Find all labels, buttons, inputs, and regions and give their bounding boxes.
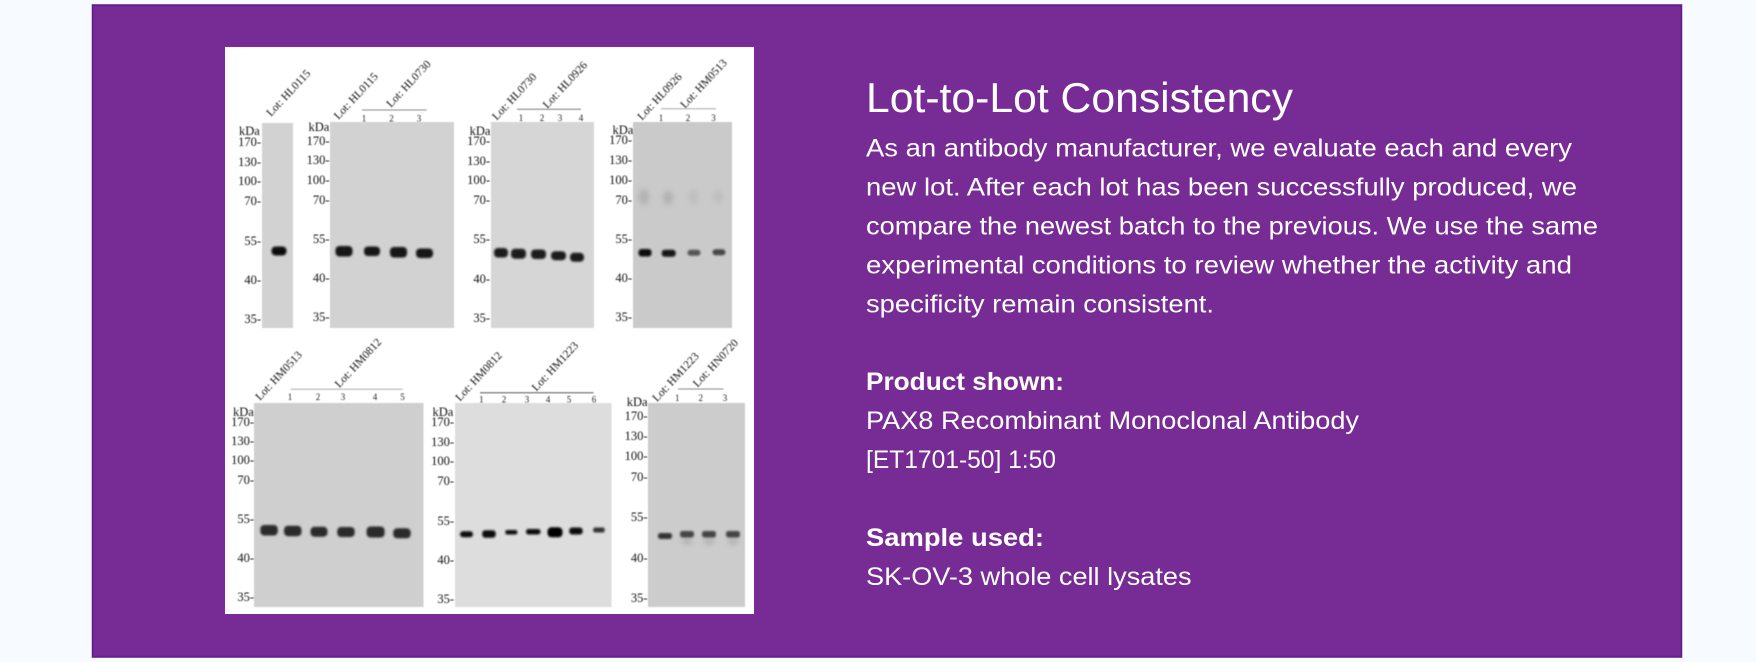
heading: Lot-to-Lot Consistency (866, 74, 1293, 121)
blot: Lots HM1223 and HN0720: 40- (631, 551, 648, 565)
text block: description: new lot. After each lot has been successfully produced, we (866, 174, 1577, 202)
blot: Lots HM0812 and HM1223: 2 (502, 394, 506, 404)
blot: Lot HL0115: 40- (244, 273, 261, 287)
blot: Lots HM0513 and HM0812: 70- (237, 473, 254, 487)
blot: Lots HM0812 and HM1223: kDa (432, 405, 454, 419)
blot: Lots HL0926 and HM0513: 2 (686, 113, 690, 123)
blot: Lots HM0513 and HM0812: 3 (341, 392, 346, 402)
text block: description: As an antibody manufacturer, we evaluate each and every (866, 135, 1573, 163)
blot: Lots HL0730 and HL0926: 3 (558, 113, 563, 123)
blot: Lots HL0730 and HL0926: 1 (519, 113, 523, 123)
blot: Lots HL0115 and HL0730: 130- (307, 153, 330, 167)
blot: Lots HL0926 and HM0513: 40- (615, 271, 632, 285)
blot: Lots HL0730 and HL0926: 55- (473, 232, 490, 246)
blot: Lots HM0513 and HM0812: 170- (231, 415, 254, 429)
blot: Lots HL0115 and HL0730: 170- (307, 134, 330, 148)
blot: Lot HL0115: 70- (244, 194, 261, 208)
blot: Lots HM0513 and HM0812: 130- (231, 434, 254, 448)
blot: Lots HM0812 and HM1223: 100- (431, 454, 454, 468)
blot: Lots HM0513 and HM0812: 1 (288, 392, 292, 402)
blot: Lots HL0730 and HL0926: 35- (473, 311, 490, 325)
blot: Lots HM0513 and HM0812: 35- (237, 590, 254, 604)
blot: Lots HM0513 and HM0812: 4 (373, 392, 378, 402)
blot: Lots HL0926 and HM0513: 100- (609, 173, 632, 187)
text block: sample used: SK-OV-3 whole cell lysates (866, 563, 1192, 591)
blot: Lots HM0513 and HM0812: Lot: HM0812 (333, 336, 384, 390)
blot: Lots HL0926 and HM0513: Lot: HM0513 (678, 57, 730, 111)
blot: Lot HL0115: kDa (239, 124, 260, 138)
blot: Lots HL0115 and HL0730: 40- (313, 271, 330, 285)
text block: description: compare the newest batch to the previous. We use the same (866, 212, 1598, 240)
blot: Lots HM0812 and HM1223: 40- (437, 553, 454, 567)
blot: Lots HL0926 and HM0513: 130- (609, 153, 632, 167)
blot: Lots HM0812 and HM1223: 35- (437, 592, 454, 606)
blot: Lots HL0730 and HL0926 (467, 59, 594, 328)
blot: Lots HL0115 and HL0730: 55- (313, 232, 330, 246)
blot: Lots HM0513 and HM0812: 55- (237, 512, 254, 526)
blot: Lots HM0513 and HM0812: 100- (231, 453, 254, 467)
blot: Lots HM0513 and HM0812: kDa (233, 405, 254, 419)
text block: sample used (866, 524, 1192, 591)
blot: Lots HM1223 and HN0720: Lot: HN0720 (691, 337, 741, 390)
blot: Lots HM1223 and HN0720: 70- (631, 470, 648, 484)
blot: Lots HM1223 and HN0720: Lot: HM1223 (650, 350, 702, 404)
blot: Lots HL0926 and HM0513: 70- (615, 193, 632, 207)
blot: Lots HM0812 and HM1223 (431, 340, 612, 607)
blot: Lots HL0926 and HM0513: Lot: HL0926 (635, 71, 685, 123)
blot: Lot HL0115: 55- (244, 234, 261, 248)
text block: description (866, 135, 1598, 318)
blot: Lots HM1223 and HN0720: 3 (723, 393, 728, 403)
blot: Lots HL0115 and HL0730: kDa (308, 120, 330, 134)
blot: Lots HL0926 and HM0513: 35- (615, 310, 632, 324)
text block: sample used: Sample used: (866, 524, 1044, 552)
blot: Lots HM0812 and HM1223: 70- (437, 474, 454, 488)
blot: Lots HL0115 and HL0730: 3 (417, 114, 422, 124)
blot: Lots HL0730 and HL0926: Lot: HL0730 (490, 71, 540, 123)
blot: Lot HL0115 (238, 68, 314, 328)
blot: Lots HL0730 and HL0926: 130- (467, 154, 490, 168)
blot: Lots HM1223 and HN0720 (625, 337, 745, 607)
blot: Lots HM1223 and HN0720: kDa (627, 395, 648, 409)
blot: Lots HL0926 and HM0513: 170- (609, 133, 632, 147)
blot: Lot HL0115: 35- (244, 312, 261, 326)
blot: Lots HL0115 and HL0730: 2 (389, 114, 394, 124)
text block: product shown (866, 368, 1360, 474)
blot: Lots HL0730 and HL0926: 70- (473, 193, 490, 207)
blot: Lots HM0513 and HM0812 (231, 336, 424, 607)
blot: Lots HM0812 and HM1223: 170- (431, 415, 454, 429)
blot: Lot HL0115: 170- (238, 135, 261, 149)
text block: product shown: [ET1701-50] 1:50 (866, 446, 1056, 474)
blot: Lots HL0730 and HL0926: 170- (467, 134, 490, 148)
blot: Lots HL0926 and HM0513: kDa (612, 123, 634, 137)
blot: Lots HM1223 and HN0720: 55- (631, 510, 648, 524)
blot: Lots HM1223 and HN0720: 1 (675, 393, 680, 403)
blot: Lots HM0513 and HM0812: 2 (316, 392, 320, 402)
blot: Lots HM0812 and HM1223: 6 (592, 394, 597, 404)
blot: Lots HM1223 and HN0720: 35- (631, 591, 648, 605)
blot: Lots HL0115 and HL0730: Lot: HL0730 (384, 58, 434, 110)
blot: Lots HM0812 and HM1223: 1 (479, 394, 484, 404)
blot: Lots HM0812 and HM1223: Lot: HM0812 (453, 350, 505, 404)
blot: Lot HL0115: 100- (238, 174, 261, 188)
figure: western blot image (224, 46, 754, 614)
blot: Lots HM1223 and HN0720: 100- (625, 449, 648, 463)
blot: Lots HL0115 and HL0730: 1 (362, 114, 366, 124)
blot: Lots HL0730 and HL0926: 40- (473, 272, 490, 286)
text block: product shown: PAX8 Recombinant Monoclonal Antibody (866, 407, 1360, 435)
blot: Lots HM1223 and HN0720: 170- (625, 409, 648, 423)
blot: Lots HL0926 and HM0513: 3 (711, 113, 716, 123)
blot: Lots HM0812 and HM1223: 130- (431, 435, 454, 449)
blot: Lots HL0730 and HL0926: 2 (540, 113, 544, 123)
blot: Lots HL0115 and HL0730: 100- (307, 173, 330, 187)
blot: Lots HL0926 and HM0513 (609, 57, 732, 328)
text block: description: experimental conditions to review whether the activity and (866, 251, 1572, 279)
blot: Lots HM0812 and HM1223: 55- (437, 514, 454, 528)
blot: Lots HL0730 and HL0926: kDa (470, 124, 491, 138)
blot: Lots HM0513 and HM0812: 5 (400, 392, 405, 402)
blot: Lots HL0730 and HL0926: Lot: HL0926 (541, 59, 590, 111)
blot: Lots HM0812 and HM1223: 5 (567, 394, 572, 404)
blot: Lots HL0730 and HL0926: 100- (467, 173, 490, 187)
blot: Lots HL0926 and HM0513: 55- (615, 232, 632, 246)
blot: Lots HL0115 and HL0730: Lot: HL0115 (332, 71, 381, 122)
blot: Lots HL0926 and HM0513: 1 (659, 113, 663, 123)
blot: Lots HM0812 and HM1223: 4 (546, 394, 551, 404)
text block: description: specificity remain consistent. (866, 290, 1214, 318)
blot: Lot HL0115: 130- (238, 155, 261, 169)
blot: Lots HL0730 and HL0926: 4 (579, 113, 584, 123)
blot: Lots HM0812 and HM1223: Lot: HM1223 (530, 340, 581, 394)
blot: Lots HM1223 and HN0720: 130- (625, 429, 648, 443)
text block: product shown: Product shown: (866, 368, 1064, 396)
blot: Lots HM1223 and HN0720: 2 (698, 393, 703, 403)
blot: Lots HM0812 and HM1223: 3 (525, 394, 530, 404)
blot: Lots HL0115 and HL0730: 35- (313, 310, 330, 324)
blot: Lots HL0115 and HL0730: 70- (313, 193, 330, 207)
blot: Lots HL0115 and HL0730 (307, 58, 454, 328)
blot: Lots HM0513 and HM0812: Lot: HM0513 (253, 349, 305, 403)
blot: Lot HL0115: Lot: HL0115 (264, 68, 314, 119)
blot: Lots HM0513 and HM0812: 40- (237, 551, 254, 565)
